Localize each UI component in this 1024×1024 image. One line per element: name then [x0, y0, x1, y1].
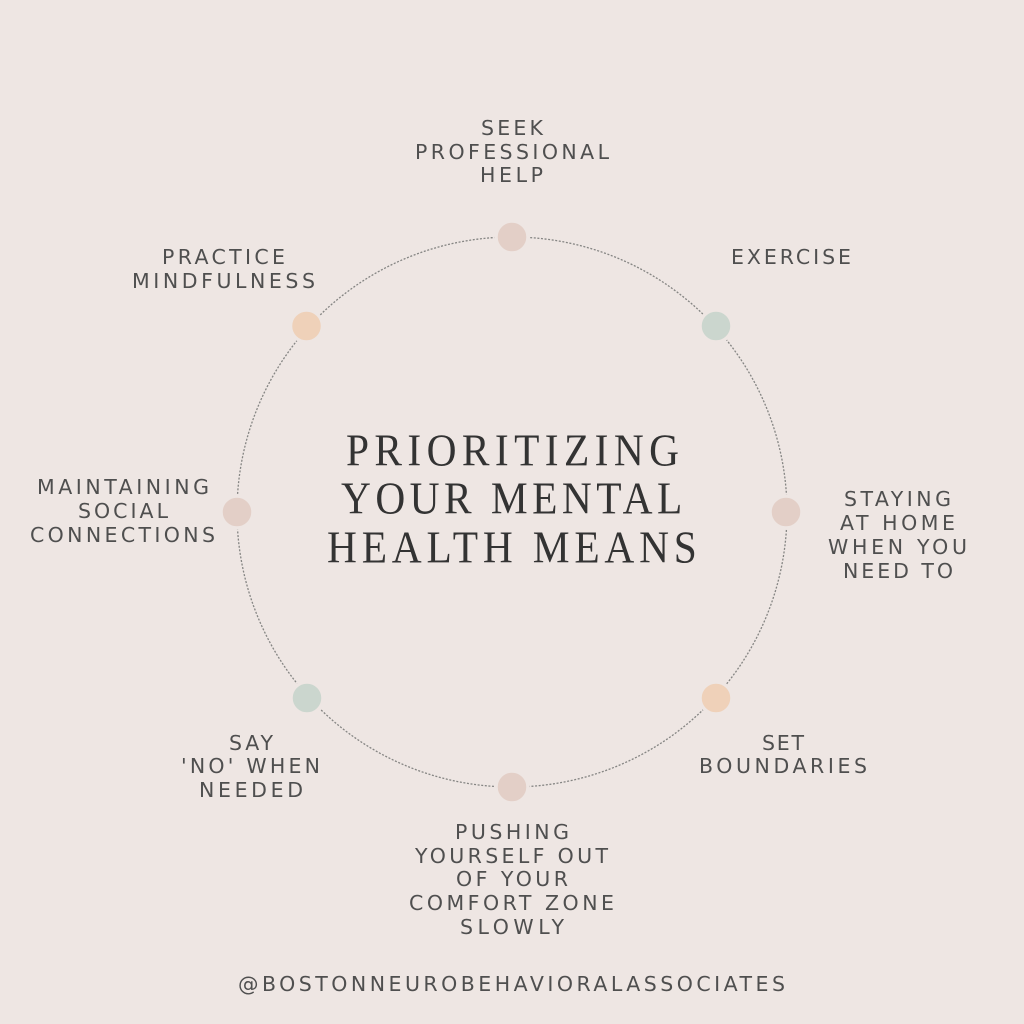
dotted circle ring	[237, 237, 787, 787]
label: say no when needed: 'NO' WHEN	[181, 754, 320, 778]
label: say no when needed: NEEDED	[199, 778, 303, 802]
label: practice mindfulness: MINDFULNESS	[132, 269, 315, 293]
dots around the ring	[221, 221, 802, 803]
label: staying at home when you need to: WHEN YOU	[828, 535, 967, 559]
label: pushing yourself out of your comfort zone slowly: SLOWLY	[460, 915, 564, 939]
footer handle: @BOSTONNEUROBEHAVIORALASSOCIATES	[238, 972, 785, 996]
label: staying at home when you need to: STAYING	[844, 487, 951, 511]
label: practice mindfulness	[132, 245, 315, 293]
label: maintaining social connections: CONNECTIONS	[30, 523, 215, 547]
title: YOUR MENTAL	[341, 474, 682, 524]
label: set boundaries: SET	[762, 731, 804, 755]
label: say no when needed: SAY	[229, 731, 273, 755]
label: maintaining social connections: MAINTAINING	[37, 475, 209, 499]
label: pushing yourself out of your comfort zone slowly: OF YOUR	[456, 867, 568, 891]
label: say no when needed	[181, 731, 320, 802]
title: HEALTH MEANS	[327, 523, 697, 573]
label: seek professional help: HELP	[480, 163, 543, 187]
label: pushing yourself out of your comfort zone slowly	[409, 820, 614, 939]
label: seek professional help	[415, 116, 610, 187]
label: pushing yourself out of your comfort zone slowly: PUSHING	[455, 820, 569, 844]
label: pushing yourself out of your comfort zone slowly: YOURSELF OUT	[414, 844, 608, 868]
label: maintaining social connections	[30, 475, 215, 547]
label: seek professional help: SEEK	[481, 116, 544, 140]
label: practice mindfulness: PRACTICE	[162, 245, 285, 269]
title	[327, 426, 697, 573]
label: staying at home when you need to: NEED TO	[843, 559, 953, 583]
title: PRIORITIZING	[346, 426, 679, 476]
label: seek professional help: PROFESSIONAL	[415, 140, 610, 164]
label: staying at home when you need to	[828, 487, 967, 583]
label: exercise: EXERCISE	[731, 245, 851, 269]
label: maintaining social connections: SOCIAL	[78, 499, 169, 523]
label: pushing yourself out of your comfort zone slowly: COMFORT ZONE	[409, 891, 614, 915]
label: set boundaries: BOUNDARIES	[699, 754, 867, 778]
label: set boundaries	[699, 731, 867, 778]
label: staying at home when you need to: AT HOME	[840, 511, 955, 535]
